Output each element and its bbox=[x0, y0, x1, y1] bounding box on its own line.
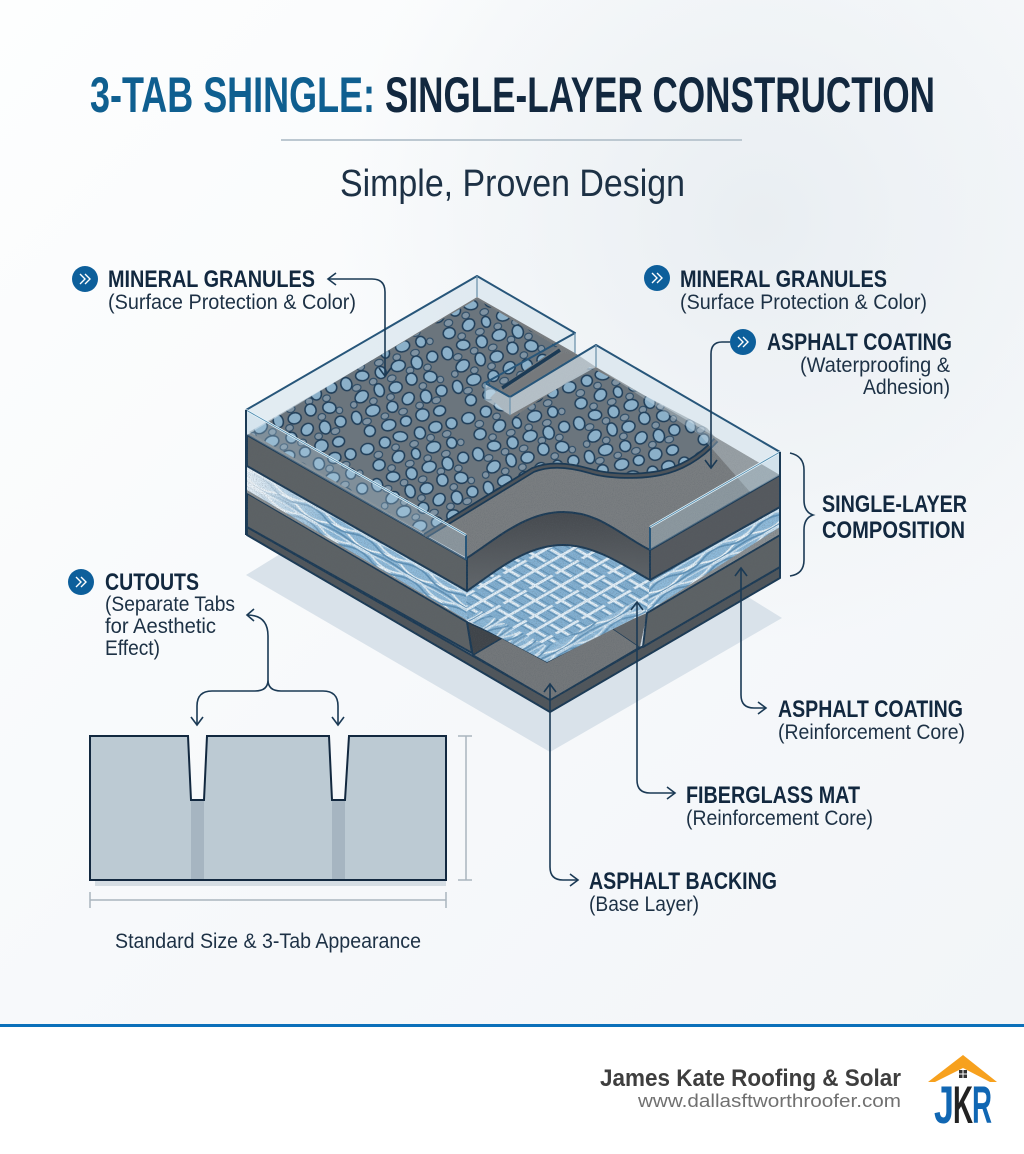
icon: chevron badge bbox=[68, 569, 94, 595]
website: www.dallasftworthroofer.com bbox=[637, 1090, 901, 1111]
clear glass coating bbox=[246, 276, 780, 560]
texture speckle bbox=[247, 297, 782, 712]
arrow: asphalt coating top bbox=[705, 342, 730, 468]
upper layer front faces bbox=[247, 435, 780, 591]
label: fiberglass mat: FIBERGLASS MAT bbox=[686, 782, 860, 809]
label: single-layer composition: COMPOSITION bbox=[822, 517, 965, 544]
label: asphalt backing: ASPHALT BACKING bbox=[589, 868, 777, 895]
shadow under shingle bbox=[246, 480, 782, 752]
label: asphalt backing bbox=[589, 868, 777, 916]
label: asphalt coating top bbox=[730, 329, 952, 399]
label: mineral granules right bbox=[644, 265, 927, 314]
label: mineral granules right: MINERAL GRANULES bbox=[680, 266, 887, 293]
label: asphalt coating top: (Waterproofing & bbox=[800, 354, 950, 377]
label: cutouts: CUTOUTS bbox=[105, 569, 199, 596]
label: mineral granules left: (Surface Protection & Color) bbox=[108, 291, 356, 314]
dimension lines bbox=[90, 736, 472, 908]
fiberglass mat bbox=[246, 467, 780, 662]
logo: R bbox=[972, 1076, 992, 1135]
label: cutouts: Effect) bbox=[105, 637, 160, 660]
label: cutouts bbox=[68, 569, 235, 660]
label: cutouts: (Separate Tabs bbox=[105, 593, 235, 616]
caption: standard size: Standard Size & 3-Tab Appearance bbox=[115, 930, 421, 953]
isometric shingle cross-section bbox=[246, 276, 782, 712]
title: 3-TAB SHINGLE: bbox=[90, 67, 375, 123]
label: asphalt coating top: Adhesion) bbox=[863, 376, 950, 399]
label: fiberglass mat bbox=[686, 782, 873, 830]
logo: J bbox=[934, 1076, 954, 1135]
bracket: single-layer composition bbox=[790, 453, 813, 576]
subtitle: Simple, Proven Design bbox=[340, 163, 685, 205]
upper asphalt coating surface bbox=[247, 297, 780, 558]
label: asphalt coating lower: (Reinforcement Core) bbox=[778, 721, 965, 744]
arrow: mineral granules left bbox=[328, 273, 391, 376]
asphalt backing layer bbox=[247, 527, 780, 712]
cutout slot bbox=[502, 350, 575, 395]
logo bbox=[928, 1055, 997, 1135]
granule edge band bbox=[425, 440, 716, 536]
arrow: asphalt backing bbox=[544, 684, 578, 886]
label: single-layer composition: SINGLE-LAYER bbox=[822, 491, 967, 518]
logo: K bbox=[953, 1076, 973, 1135]
label: mineral granules left: MINERAL GRANULES bbox=[108, 266, 315, 293]
label: fiberglass mat: (Reinforcement Core) bbox=[686, 807, 873, 830]
icon: chevron badge bbox=[730, 329, 756, 355]
label: mineral granules left bbox=[72, 266, 356, 314]
arrow: asphalt coating lower bbox=[735, 568, 766, 714]
footer bbox=[0, 1024, 1024, 1154]
arrow: cutouts split bbox=[191, 609, 344, 725]
lower asphalt coating bbox=[247, 489, 780, 653]
label: mineral granules right: (Surface Protection & Color) bbox=[680, 291, 927, 314]
icon: chevron badge bbox=[644, 265, 670, 291]
label: asphalt coating lower bbox=[778, 696, 965, 744]
label: asphalt backing: (Base Layer) bbox=[589, 893, 699, 916]
label: cutouts: for Aesthetic bbox=[105, 615, 216, 638]
mineral granules bbox=[249, 299, 715, 533]
icon: chevron badge bbox=[72, 266, 98, 292]
arrow: fiberglass mat bbox=[631, 602, 675, 799]
left and right edges bbox=[246, 410, 780, 578]
flat 3-tab shingle diagram bbox=[90, 736, 446, 886]
label: asphalt coating lower: ASPHALT COATING bbox=[778, 696, 963, 723]
title bbox=[90, 67, 935, 123]
label: asphalt coating top: ASPHALT COATING bbox=[767, 329, 952, 356]
label: single-layer composition bbox=[822, 491, 967, 544]
company name: James Kate Roofing & Solar bbox=[600, 1065, 901, 1092]
